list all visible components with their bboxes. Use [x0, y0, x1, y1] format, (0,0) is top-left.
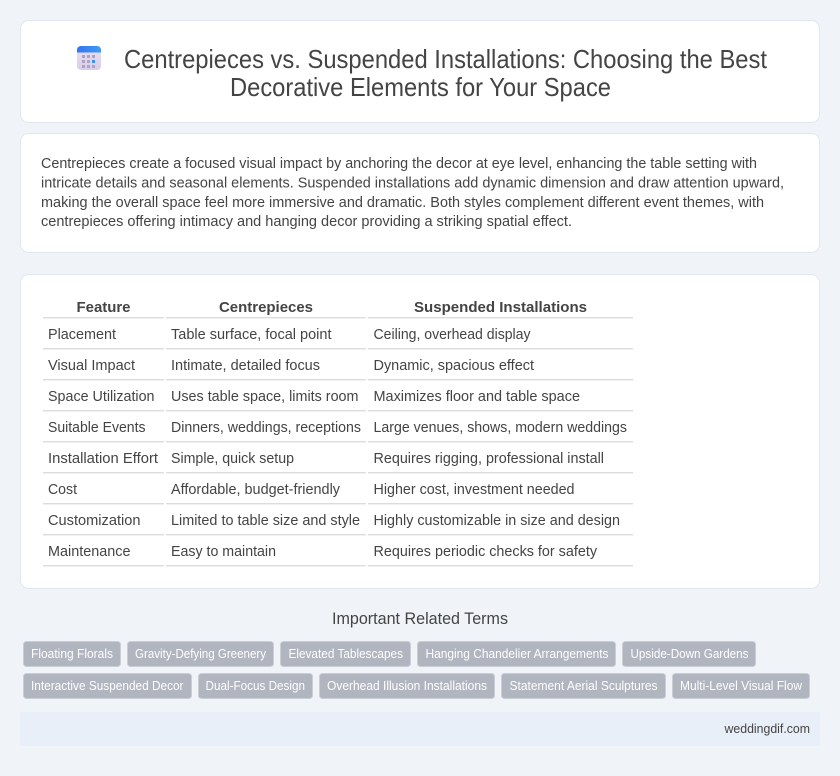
row: customization: Customization [48, 513, 140, 529]
footer [20, 712, 820, 746]
row: maintenance: Easy to maintain [171, 544, 276, 560]
table header: Feature [76, 299, 130, 316]
row: space utilization [48, 389, 580, 405]
tag [198, 674, 312, 698]
tag [418, 642, 616, 666]
tag: Dual-Focus Design [206, 679, 305, 693]
row: suitable events: Large venues, shows, modern weddings [374, 420, 627, 436]
tag [24, 674, 192, 698]
row: space utilization: Maximizes floor and table space [374, 389, 580, 405]
row: cost: Affordable, budget-friendly [171, 482, 341, 498]
tag [24, 642, 120, 666]
tag [128, 642, 274, 666]
text block: description: intricate details and seasonal elements. Suspended installations add dynamic dimension and draw attention upward, [41, 176, 784, 192]
tag: Elevated Tablescapes [288, 647, 403, 661]
row: customization: Limited to table size and style [171, 513, 360, 529]
text block: description: Centrepieces create a focused visual impact by anchoring the decor at eye level, enhancing the table setting with [41, 156, 757, 172]
row: installation effort: Simple, quick setup [171, 451, 294, 467]
tag: Upside-Down Gardens [630, 647, 748, 661]
row: installation effort: Requires rigging, professional install [374, 451, 604, 467]
heading: related terms: Important Related Terms [332, 610, 508, 628]
tag [622, 642, 756, 666]
row: customization: Highly customizable in size and design [374, 513, 620, 529]
title: Decorative Elements for Your Space [230, 72, 611, 102]
row: placement: Placement [48, 327, 116, 343]
tag [280, 642, 410, 666]
panel: comparison table [20, 274, 820, 588]
text block: description [41, 156, 784, 230]
tag: Gravity-Defying Greenery [135, 647, 267, 661]
footer: weddingdif.com [724, 722, 810, 736]
text block: description: making the overall space feel more immersive and dramatic. Both styles complement different event themes, with [41, 195, 764, 211]
row: cost [48, 482, 574, 498]
text block: description: centrepieces offering intimacy and hanging decor providing a striking spatial effect. [41, 214, 572, 230]
row: customization [48, 513, 620, 529]
row: visual impact: Visual Impact [48, 358, 135, 374]
row: installation effort [48, 451, 604, 467]
tag: Interactive Suspended Decor [31, 679, 184, 693]
icon: calendar [77, 46, 101, 70]
table header: Suspended Installations [414, 299, 587, 316]
row: suitable events: Dinners, weddings, receptions [171, 420, 361, 436]
row: maintenance: Requires periodic checks for safety [374, 544, 598, 560]
row: visual impact: Dynamic, spacious effect [374, 358, 534, 374]
title [124, 44, 768, 102]
row: installation effort: Installation Effort [48, 451, 158, 467]
row: suitable events [48, 420, 627, 436]
title: Centrepieces vs. Suspended Installations: Choosing the Best [124, 44, 768, 74]
tag: Multi-Level Visual Flow [680, 679, 803, 693]
tag: Overhead Illusion Installations [327, 679, 487, 693]
panel: introduction text [20, 134, 820, 252]
tag: Statement Aerial Sculptures [510, 679, 658, 693]
tag [672, 674, 810, 698]
panel: header [20, 20, 820, 122]
row: cost: Cost [48, 482, 77, 498]
table header [76, 299, 587, 316]
table header: Centrepieces [219, 299, 313, 316]
tag [502, 674, 666, 698]
row: visual impact [48, 358, 534, 374]
row: space utilization: Space Utilization [48, 389, 154, 405]
row: placement: Ceiling, overhead display [374, 327, 531, 343]
tag: Hanging Chandelier Arrangements [426, 647, 608, 661]
row: visual impact: Intimate, detailed focus [171, 358, 320, 374]
row: cost: Higher cost, investment needed [374, 482, 574, 498]
row: space utilization: Uses table space, limits room [171, 389, 358, 405]
row: maintenance: Maintenance [48, 544, 130, 560]
tag: Floating Florals [31, 647, 113, 661]
row: maintenance [48, 544, 598, 560]
related terms tags [24, 642, 810, 698]
row: placement [48, 327, 531, 343]
row: placement: Table surface, focal point [171, 327, 332, 343]
row: suitable events: Suitable Events [48, 420, 146, 436]
tag [320, 674, 494, 698]
